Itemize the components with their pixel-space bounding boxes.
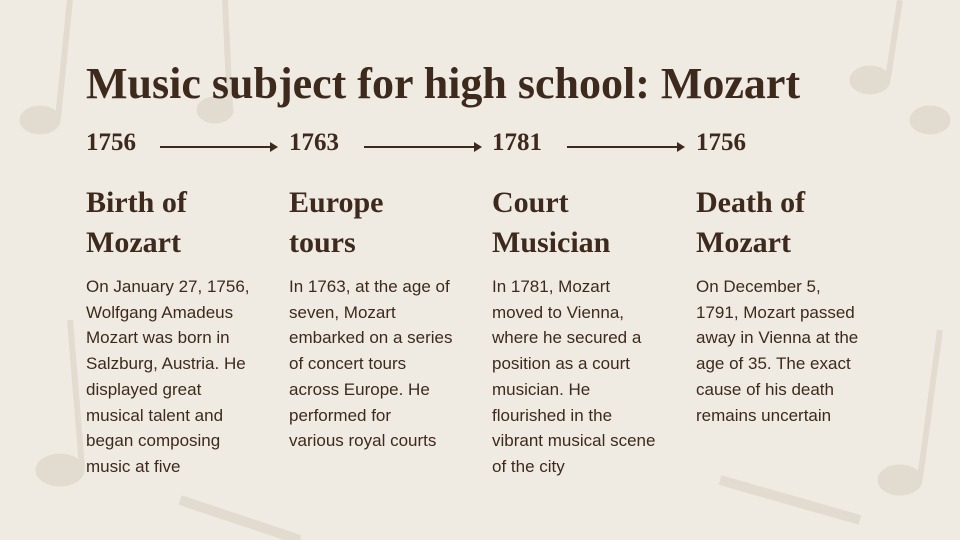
- text: tours: seven, Mozart: [289, 303, 396, 322]
- text: death: away in Vienna at the: [696, 328, 858, 347]
- heading: death: [696, 186, 806, 259]
- text: tours: of concert tours: [289, 354, 406, 373]
- text: tours: various royal courts: [289, 431, 436, 450]
- text: death: On December 5,: [696, 277, 821, 296]
- text: tours: across Europe. He: [289, 380, 430, 399]
- text: tours: [289, 277, 452, 450]
- year 1763: 1763: [289, 129, 339, 156]
- heading: birth: Mozart: [86, 226, 181, 259]
- text: death: age of 35. The exact: [696, 354, 851, 373]
- year 1756 (death): 1756: [696, 129, 746, 156]
- text: court: moved to Vienna,: [492, 303, 624, 322]
- arrow 1: [160, 146, 276, 148]
- text: court: where he secured a: [492, 328, 641, 347]
- text: birth: music at five: [86, 457, 180, 476]
- text: birth: On January 27, 1756,: [86, 277, 250, 296]
- text: death: [696, 277, 858, 425]
- arrow 2: [364, 146, 480, 148]
- text: court: vibrant musical scene: [492, 431, 655, 450]
- text: death: 1791, Mozart passed: [696, 303, 855, 322]
- heading: court: Musician: [492, 226, 610, 259]
- heading: tours: [289, 186, 383, 259]
- text: court: position as a court: [492, 354, 630, 373]
- heading: death: Death of: [696, 186, 805, 219]
- text: death: remains uncertain: [696, 406, 831, 425]
- text: court: of the city: [492, 457, 565, 476]
- text: court: flourished in the: [492, 406, 612, 425]
- heading: tours: Europe: [289, 186, 383, 219]
- text: court: musician. He: [492, 380, 590, 399]
- text: tours: In 1763, at the age of: [289, 277, 450, 296]
- arrow 3: [567, 146, 683, 148]
- text: birth: displayed great: [86, 380, 201, 399]
- text: death: cause of his death: [696, 380, 834, 399]
- heading: death: Mozart: [696, 226, 791, 259]
- text: court: In 1781, Mozart: [492, 277, 610, 296]
- text: birth: Salzburg, Austria. He: [86, 354, 246, 373]
- text: birth: [86, 277, 250, 476]
- heading: court: Court: [492, 186, 569, 219]
- text: birth: began composing: [86, 431, 220, 450]
- year 1756: 1756: [86, 129, 136, 156]
- text: tours: embarked on a series: [289, 328, 452, 347]
- text: birth: Mozart was born in: [86, 328, 230, 347]
- heading: birth: Birth of: [86, 186, 187, 219]
- year 1781: 1781: [492, 129, 542, 156]
- heading: birth: [86, 186, 188, 259]
- text: court: [492, 277, 655, 476]
- text: birth: musical talent and: [86, 406, 223, 425]
- text: tours: performed for: [289, 406, 391, 425]
- heading: tours: tours: [289, 226, 356, 259]
- text: birth: Wolfgang Amadeus: [86, 303, 233, 322]
- heading: court: [492, 186, 610, 259]
- title: Music subject for high school: Mozart: [86, 59, 800, 108]
